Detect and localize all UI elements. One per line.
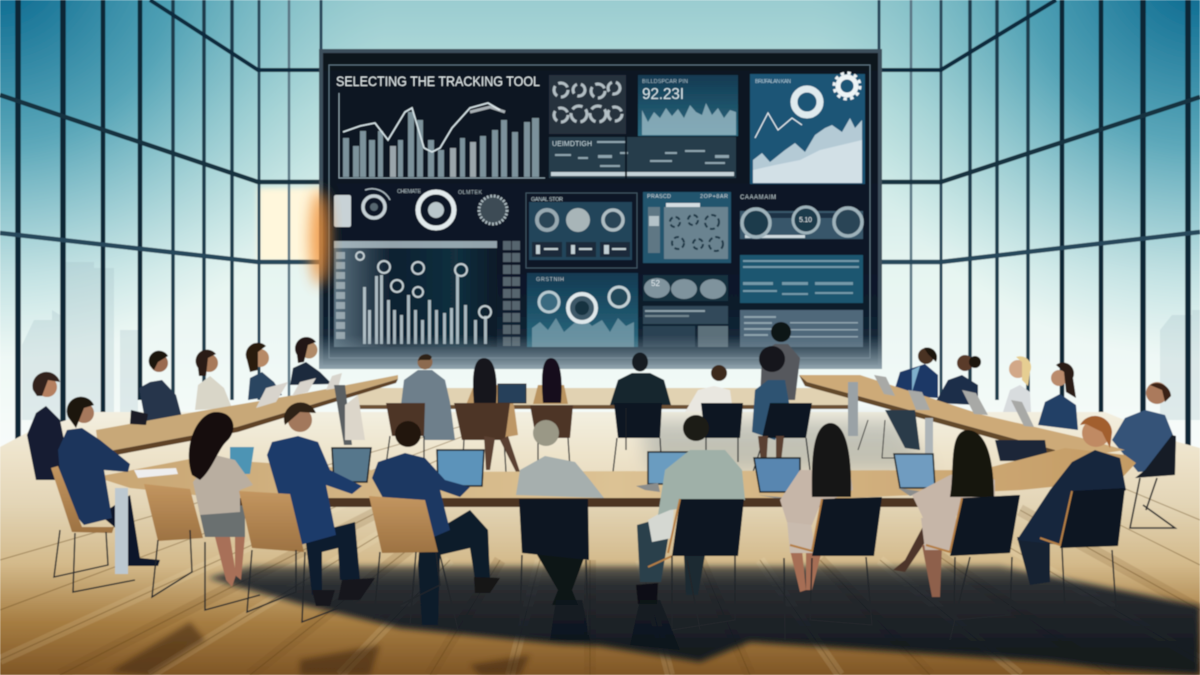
panel: ring thumbnails xyxy=(549,75,626,134)
panel: ovals and notes: 52 xyxy=(651,279,660,288)
panel: radial histogram xyxy=(527,273,638,347)
person: man navy center xyxy=(372,421,500,625)
shadow band on floor xyxy=(208,566,1200,675)
distant city skyline xyxy=(22,262,1200,420)
person: man gray hair xyxy=(516,420,604,605)
person: woman long hair center right xyxy=(780,423,853,592)
dashboard wall screen xyxy=(310,49,882,369)
chair wire legs xyxy=(54,530,1116,640)
window mullions xyxy=(0,0,1200,450)
person: standing presenter xyxy=(752,322,800,440)
floor dark wood grain xyxy=(110,622,530,675)
near table xyxy=(96,448,1136,507)
back row standing legs xyxy=(484,436,784,472)
left table laptops xyxy=(256,373,342,408)
back row chair legs xyxy=(386,408,810,475)
person: left woman navy xyxy=(246,343,282,400)
panel: gear and mountain chart: BRIJFALAN KAN xyxy=(755,79,791,85)
person: man light gray blazer xyxy=(636,415,745,604)
panel: KPI number chart xyxy=(638,75,738,136)
person: far right man xyxy=(1112,382,1173,472)
left side table group xyxy=(27,337,398,480)
person: left woman dark xyxy=(290,337,332,385)
near row laptops xyxy=(230,447,935,498)
left table chair back xyxy=(130,410,148,425)
person: left woman cream jacket xyxy=(195,350,232,410)
panel: KPI number chart: 92.23I xyxy=(642,86,684,103)
chair tan edges xyxy=(648,491,1072,567)
panel: dial gauges: 5.10 xyxy=(799,217,812,224)
panel: data tables xyxy=(740,255,863,347)
person: man navy at table end xyxy=(58,397,160,566)
panel: process map: 2OP+8AR xyxy=(700,194,728,200)
person: man reddish hair xyxy=(1017,416,1126,585)
person: man navy suit center left xyxy=(267,402,375,606)
back table xyxy=(358,388,850,409)
wooden floor xyxy=(0,412,1200,675)
panel: KPI number chart: BILLDSPCAR PIN xyxy=(642,79,688,85)
panel: dial gauges: CAAAMAIM xyxy=(740,195,776,201)
person: right man blue tie xyxy=(893,348,938,398)
person: right woman ponytail xyxy=(935,355,981,405)
panel: icon row: CHEMATE xyxy=(397,189,421,195)
person: woman curly hair xyxy=(189,412,253,587)
person: woman long hair right xyxy=(893,430,995,597)
panel: wide status table: UEIMDTIGH xyxy=(552,141,592,148)
right table laptops xyxy=(874,375,1034,427)
panel: radial histogram: GRSTNIH xyxy=(536,277,564,283)
floor planks xyxy=(0,415,1200,675)
right table legs and seated legs xyxy=(848,382,1048,461)
person: far left man xyxy=(27,372,68,480)
main bar and line chart xyxy=(339,93,545,178)
sun glow xyxy=(258,188,322,262)
right table xyxy=(799,375,1125,460)
foreground leg shadows xyxy=(550,600,680,650)
person: back row woman with black hair right xyxy=(533,358,568,404)
person: back row white shirt xyxy=(685,365,733,412)
panel: process map xyxy=(643,192,731,263)
far right chair xyxy=(1130,435,1176,528)
person: back row man in gray xyxy=(401,354,455,440)
back row chairs xyxy=(386,403,573,440)
panel: ovals and notes xyxy=(643,275,728,347)
icon: ring xyxy=(794,89,820,115)
window wall background xyxy=(0,0,1200,450)
chair backs dark xyxy=(519,488,1125,560)
panel: three gauges xyxy=(526,193,637,268)
person: right woman navy xyxy=(1038,363,1078,430)
panel: three gauges: GANAL STOR xyxy=(531,197,563,203)
panel: icon row: OLMTEK xyxy=(458,190,482,196)
back table group xyxy=(358,322,850,475)
orange sun flare on screen edge xyxy=(310,190,330,286)
chair backs tan xyxy=(51,466,438,553)
icon: gear xyxy=(834,73,860,99)
person: back row woman with black hair xyxy=(466,358,526,440)
panel: icon row xyxy=(334,189,507,228)
panel: lower bar chart xyxy=(334,241,497,347)
wire chair legs under right table xyxy=(858,420,915,458)
person: back row man dark xyxy=(610,352,671,405)
near table leg xyxy=(115,488,128,574)
screen title: SELECTING THE TRACKING TOOL xyxy=(336,73,540,89)
screen bottom fade xyxy=(319,335,882,369)
right side table group xyxy=(799,348,1176,528)
dark sheen under back row xyxy=(640,420,930,470)
panel: dial gauges xyxy=(740,195,863,239)
panel: process map: PRASCD xyxy=(647,194,671,200)
person: left woman patterned jacket xyxy=(139,351,184,425)
person: right blonde woman xyxy=(1003,356,1031,412)
panel: gear and mountain chart xyxy=(750,73,865,184)
near row people xyxy=(58,397,1126,625)
panel: side grid xyxy=(503,241,520,346)
near row chairs xyxy=(51,466,1125,640)
left table xyxy=(96,375,398,458)
left table leg xyxy=(334,385,352,445)
person legs: woman white trousers xyxy=(345,395,365,440)
panel: wide status table xyxy=(549,137,736,178)
back row dark chairs xyxy=(614,403,812,438)
